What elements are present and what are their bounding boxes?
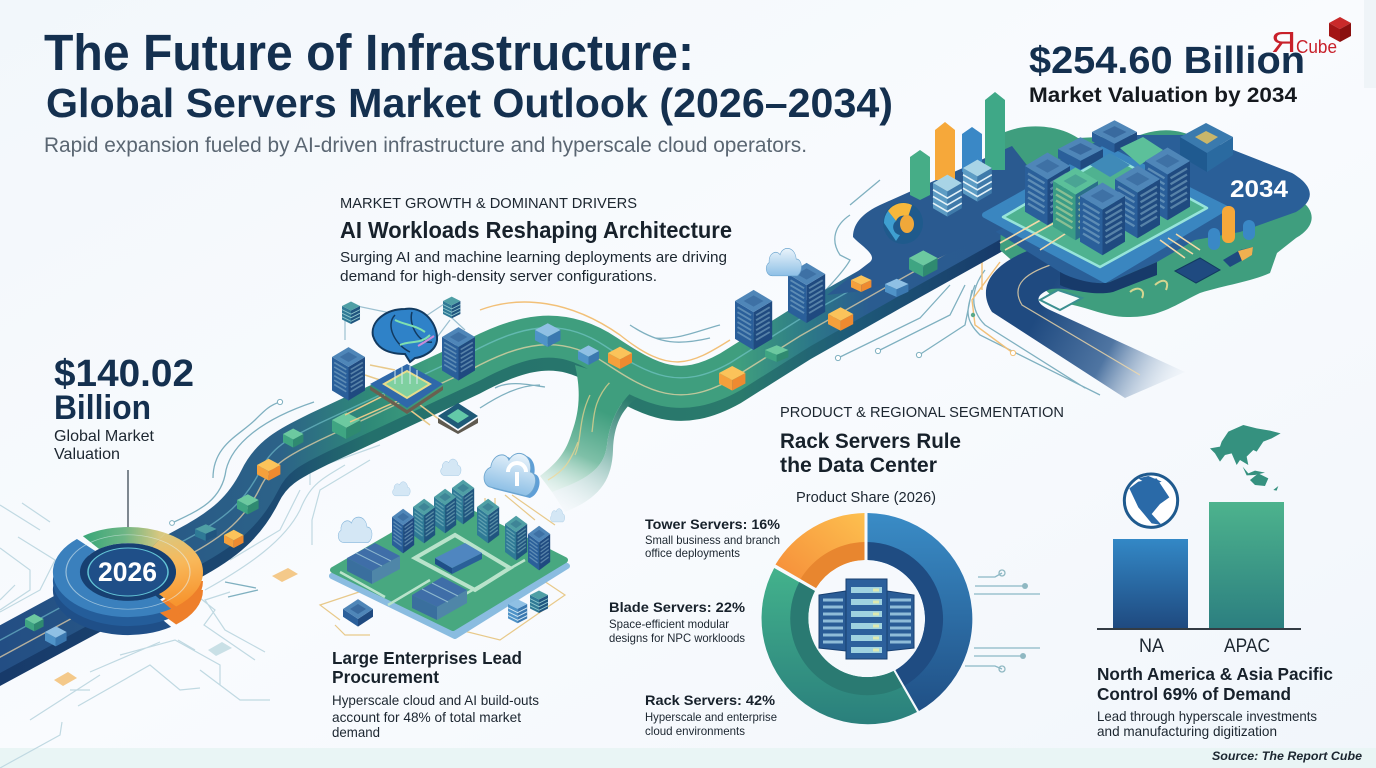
box green lower-left — [25, 614, 44, 631]
road cargo boxes — [25, 250, 938, 646]
campus surface — [333, 502, 565, 628]
axis label NA: NA — [1139, 636, 1164, 657]
racks and cloud on the road — [735, 248, 825, 350]
body line 2: account for 48% of total market — [332, 709, 521, 725]
box blue three — [885, 279, 908, 297]
rack teal 1 — [452, 480, 474, 524]
campus side — [332, 506, 567, 636]
subtitle: Rapid expansion fueled by AI-driven infrastructure and hyperscale cloud operators. — [44, 133, 807, 157]
rack navy 6 — [505, 516, 527, 560]
small cloud — [766, 248, 801, 276]
box green by chip — [332, 412, 360, 439]
logo cube — [1329, 17, 1351, 42]
title line 1: The Future of Infrastructure: — [44, 24, 694, 81]
AI chip and brain cluster — [332, 297, 478, 434]
server icon — [819, 579, 914, 659]
small chip — [343, 599, 373, 627]
caption: Market Valuation by 2034 — [1029, 83, 1297, 107]
tower label — [645, 516, 781, 560]
blade label: Space-efficient modular — [609, 617, 729, 631]
green lower layer — [1000, 126, 1312, 317]
disc 2026 — [66, 470, 190, 627]
server stack left — [933, 175, 962, 217]
traces on pad edge — [1000, 208, 1200, 258]
box orange four — [851, 275, 871, 292]
title — [44, 24, 893, 157]
cylinder blue right — [1243, 220, 1255, 240]
heading line 2: Procurement — [332, 667, 439, 687]
low building left — [347, 543, 400, 584]
box teal — [195, 524, 217, 541]
heading line 1: North America & Asia Pacific — [1097, 664, 1333, 684]
body line 3: demand — [332, 724, 380, 740]
exit road centre line — [1018, 262, 1140, 375]
axis label APAC: APAC — [1224, 636, 1270, 657]
exit road — [986, 248, 1185, 398]
rack teal 5 — [477, 499, 499, 543]
icon: north america globe — [1124, 474, 1178, 527]
notch under road — [1040, 290, 1082, 310]
value unit: Billion — [54, 389, 151, 427]
bar: orange — [935, 122, 955, 180]
market growth block — [340, 196, 732, 285]
axis — [1097, 628, 1301, 630]
rack teal 3 — [413, 499, 435, 543]
rack 2 green — [1053, 168, 1098, 240]
rack 3 front — [1080, 182, 1125, 255]
box orange — [224, 530, 244, 548]
logo word: Cube — [1296, 37, 1337, 57]
blue tile — [1090, 153, 1130, 177]
cloud campus illustration — [320, 446, 567, 640]
cylinder blue left — [1208, 228, 1220, 250]
rack 1 — [1025, 152, 1070, 225]
year label 2026: 2026 — [98, 557, 157, 587]
box orange upper — [257, 459, 280, 481]
green tile — [1120, 137, 1163, 165]
box green four — [909, 250, 938, 277]
blade label: designs for NPC workloods — [609, 631, 745, 645]
server stack right — [963, 160, 992, 202]
tower label: Tower Servers: 16% — [645, 516, 781, 532]
blue upper layer — [980, 135, 1310, 283]
tower label: Small business and branch — [645, 533, 780, 547]
donut labels — [609, 516, 781, 738]
box teal upper — [283, 429, 303, 448]
heading line 2: Control 69% of Demand — [1097, 684, 1291, 704]
2026 valuation — [54, 353, 194, 463]
server racks 2034 — [1025, 120, 1233, 255]
small chip — [438, 403, 478, 434]
value: $254.60 Billion — [1029, 40, 1305, 82]
bar: blue — [962, 127, 982, 172]
bar: tall green — [985, 92, 1005, 170]
green pad — [1003, 155, 1207, 267]
side rack right — [887, 591, 914, 651]
large cloud — [482, 446, 545, 499]
rack navy 7 — [528, 526, 550, 570]
small devices near 2034 — [1175, 206, 1255, 283]
circuit nodes — [999, 570, 1028, 672]
connector line — [127, 470, 129, 538]
capsule tip — [1238, 247, 1253, 261]
caption line 1: Global Market — [54, 428, 155, 445]
box blue one — [535, 323, 560, 347]
top right appliance — [1180, 123, 1233, 172]
ring — [66, 535, 190, 627]
bar: green short — [910, 150, 930, 200]
rack label — [645, 692, 777, 738]
centre rack — [846, 579, 887, 659]
left bars and stacks near 2034 — [883, 92, 1005, 244]
regional text block — [1097, 664, 1333, 739]
rack teal 2 — [434, 489, 456, 533]
connector lines — [320, 495, 565, 640]
rack label: Rack Servers: 42% — [645, 692, 776, 708]
main road: data lines — [0, 201, 1010, 668]
title line 2: Global Servers Market Outlook (2026–2034) — [46, 80, 893, 126]
flat server back — [1092, 120, 1137, 153]
box orange three — [828, 307, 853, 331]
2034 valuation — [1029, 40, 1305, 107]
heading line 1: Rack Servers Rule — [780, 430, 961, 453]
low building front — [412, 577, 467, 620]
slice: green — [762, 568, 917, 724]
caption line 2: Valuation — [54, 446, 120, 463]
main road: top surface — [0, 210, 1010, 660]
flat server front — [1058, 137, 1103, 170]
eyebrow: PRODUCT & REGIONAL SEGMENTATION — [780, 405, 1064, 421]
platform side — [1060, 262, 1157, 293]
rack label: cloud environments — [645, 724, 745, 738]
small stacks — [508, 599, 527, 623]
year label 2034: 2034 — [1230, 176, 1289, 203]
body line 2: and manufacturing digitization — [1097, 723, 1277, 739]
tablet — [1175, 258, 1220, 283]
small clouds — [338, 459, 565, 543]
rack right — [442, 327, 475, 380]
heading line 2: the Data Center — [780, 454, 937, 477]
heading: AI Workloads Reshaping Architecture — [340, 217, 732, 243]
box green — [237, 494, 259, 514]
small stack right — [443, 297, 460, 318]
box green three — [765, 345, 788, 362]
rack 4 — [1115, 166, 1160, 238]
rack right — [788, 263, 825, 323]
box orange two — [719, 366, 745, 391]
source note: Source: The Report Cube — [1212, 749, 1362, 763]
slice: orange — [776, 513, 864, 588]
rack 5 — [1145, 148, 1190, 220]
processor chip — [370, 364, 443, 414]
circuit lines: background traces — [0, 180, 1100, 768]
box blue lower-left — [45, 626, 67, 646]
blade label: Blade Servers: 22% — [609, 599, 746, 615]
low building centre — [435, 543, 482, 574]
enterprise block — [332, 648, 539, 740]
small chip glyphs on traces — [54, 568, 298, 686]
small stack left — [342, 302, 360, 324]
trace lines — [345, 300, 465, 345]
value: $140.02 — [54, 353, 194, 395]
box blue two — [578, 345, 599, 365]
heading line 1: Large Enterprises Lead — [332, 648, 522, 668]
left blue platform — [827, 146, 1050, 295]
body line 1: Lead through hyperscale investments — [1097, 708, 1317, 724]
eyebrow: MARKET GROWTH & DOMINANT DRIVERS — [340, 196, 637, 212]
road branch descending to cloud campus — [540, 365, 645, 512]
city platform 2034 — [827, 126, 1312, 398]
icon: asia pacific map — [1210, 425, 1281, 491]
brain icon — [373, 309, 437, 362]
rack label: Hyperscale and enterprise — [645, 710, 777, 724]
main road: side wall — [0, 223, 1010, 673]
slice: blue — [868, 513, 972, 711]
segmentation heading — [780, 405, 1064, 477]
body line 2: demand for high-density server configurations. — [340, 268, 657, 285]
capsule — [1223, 247, 1253, 267]
light surround — [985, 148, 1225, 280]
tower label: office deployments — [645, 546, 740, 560]
campus paths — [415, 535, 510, 590]
pie ring icon — [883, 202, 923, 244]
blade label — [609, 599, 746, 645]
rack left — [332, 347, 365, 400]
box orange one — [608, 347, 632, 369]
small stacks right — [530, 590, 548, 613]
cylinder orange — [1222, 206, 1235, 243]
logo mark Ya: Я — [1271, 27, 1296, 59]
body line 1: Surging AI and machine learning deployments are driving — [340, 249, 727, 266]
rack left — [735, 290, 772, 350]
chart title: Product Share (2026) — [796, 489, 936, 506]
rack navy 4 — [392, 509, 414, 553]
bar NA — [1113, 539, 1188, 628]
bar APAC — [1209, 502, 1284, 628]
donut chart — [762, 489, 1028, 724]
regional bar chart — [1097, 425, 1301, 657]
side rack left — [819, 591, 846, 651]
body line 1: Hyperscale cloud and AI build-outs — [332, 692, 539, 708]
decorative glyphs on green layer — [1130, 281, 1167, 298]
logo — [1271, 17, 1351, 59]
